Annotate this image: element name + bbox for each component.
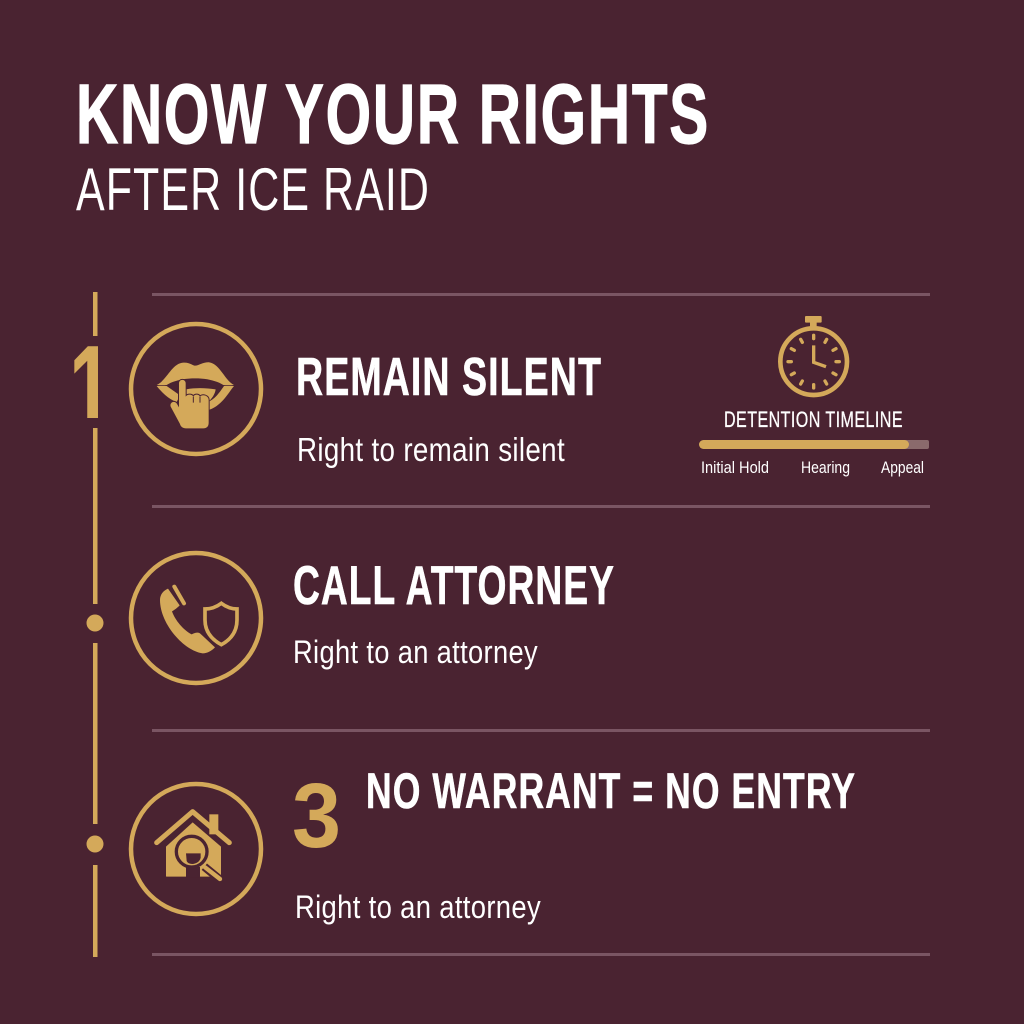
icon: house with magnifier [131,784,261,914]
text: right to an attorney: Right to an attorney [295,889,541,925]
timeline title: DETENTION TIMELINE [724,407,903,432]
label: initial hold: Initial Hold [701,458,769,477]
step number 3: 3 [292,765,341,867]
vertical timeline [86,292,104,957]
step number 1: 1 [69,321,112,459]
detention timeline [699,407,929,477]
icon: lips with finger [131,324,261,454]
text: right to an attorney: Right to an attorney [293,634,538,670]
label: appeal: Appeal [881,458,924,477]
progress bar [699,440,929,449]
subtitle: AFTER ICE RAID [76,156,430,223]
icon: stopwatch [780,316,847,395]
title: KNOW YOUR RIGHTS [76,67,710,161]
row dividers [152,293,930,956]
icon: phone and shield [131,553,261,683]
text: right to remain silent: Right to remain silent [297,431,565,468]
heading: remain silent: REMAIN SILENT [296,347,602,407]
label: hearing: Hearing [801,458,850,477]
infographic [74,83,930,957]
heading: call attorney: CALL ATTORNEY [293,554,615,616]
